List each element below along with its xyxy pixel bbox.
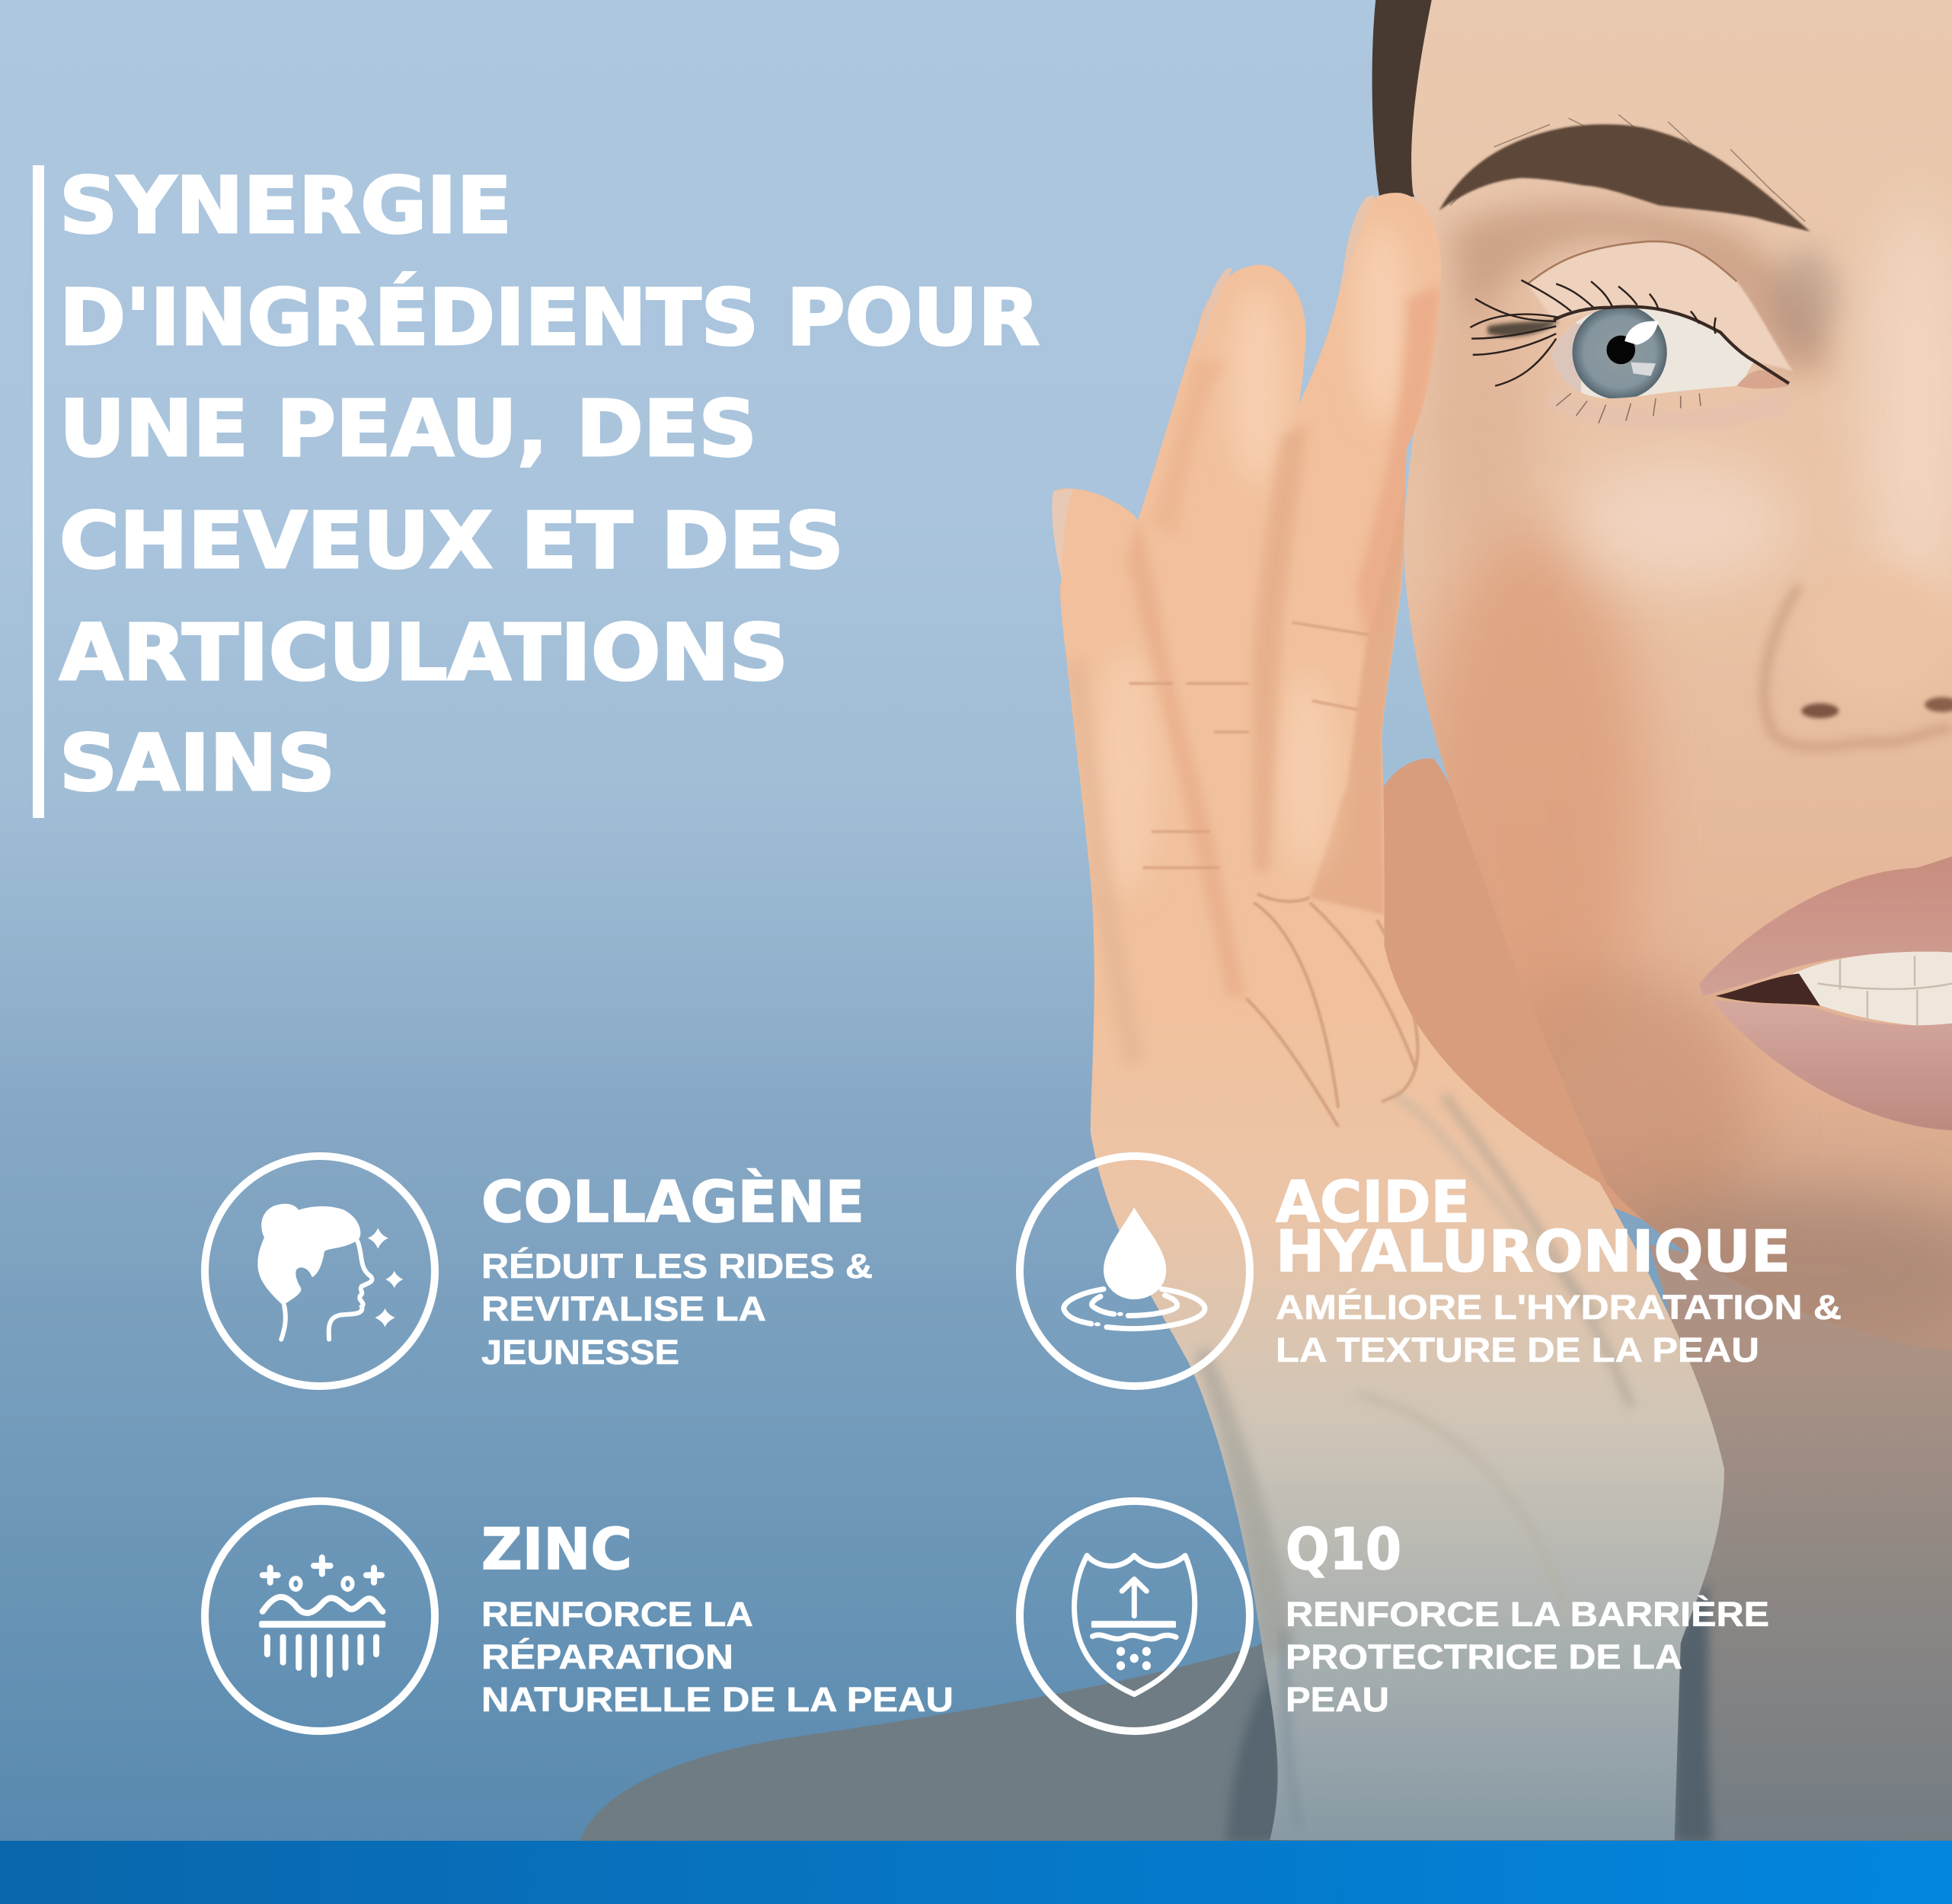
title: D'INGRÉDIENTS POUR [59, 272, 1040, 363]
title: ARTICULATIONS [59, 608, 788, 698]
title: SYNERGIE [59, 161, 512, 251]
item: acide hyaluronique: AMÉLIORE L'HYDRATATION & [1276, 1288, 1842, 1327]
item: collagène: JEUNESSE [481, 1333, 679, 1372]
eye [1470, 241, 1793, 431]
item: collagène: RÉDUIT LES RIDES & [481, 1247, 873, 1286]
item: q10: RENFORCE LA BARRIÈRE [1286, 1595, 1769, 1634]
icon: face with sparkles [205, 1156, 435, 1386]
item: collagène: REVITALISE LA [481, 1289, 766, 1328]
item: zinc: RÉPARATION [481, 1637, 733, 1676]
bottom colour band [0, 1841, 1952, 1904]
item: q10: PEAU [1286, 1680, 1389, 1719]
title: CHEVEUX ET DES [59, 496, 844, 586]
lips [1699, 857, 1952, 1130]
thumb behind the fingers [1379, 759, 1644, 1220]
nostrils [1801, 704, 1839, 718]
finger joint creases [1129, 622, 1369, 867]
fourth finger behind [1310, 491, 1405, 915]
eyebrow [1439, 114, 1810, 232]
shoulder and neck [579, 1245, 1952, 1842]
title: UNE PEAU, DES [59, 384, 757, 474]
nose side shadow [1764, 585, 1952, 747]
item: q10: PROTECTRICE DE LA [1286, 1637, 1682, 1676]
item: acide hyaluronique: LA TEXTURE DE LA PEAU [1276, 1331, 1759, 1369]
title [59, 161, 1040, 809]
item: q10 [1020, 1501, 1769, 1731]
item: acide hyaluronique: ACIDE [1276, 1168, 1470, 1235]
face [1404, 0, 1952, 1351]
item: collagène [205, 1156, 873, 1386]
icon: shield [1020, 1501, 1250, 1731]
hand [1052, 193, 1724, 1840]
fingernails [1052, 489, 1073, 579]
icon: water drop [1020, 1156, 1250, 1386]
palm folds [1246, 894, 1417, 1126]
eye socket shading [1450, 203, 1830, 373]
item: zinc: RENFORCE LA [481, 1595, 753, 1634]
hair [1372, 0, 1434, 196]
icon: skin repair layers [205, 1501, 435, 1731]
photo: woman touching her face [579, 0, 1952, 1842]
title: SAINS [59, 718, 335, 809]
item: q10: Q10 [1286, 1516, 1401, 1583]
finger shading [1126, 520, 1246, 998]
item: acide hyaluronique [1020, 1156, 1842, 1386]
title accent bar [33, 165, 44, 818]
item: acide hyaluronique: HYALURONIQUE [1276, 1218, 1791, 1285]
item: zinc: ZINC [481, 1516, 632, 1583]
item: zinc: NATURELLE DE LA PEAU [481, 1680, 954, 1719]
item: zinc [205, 1501, 954, 1731]
finger highlights [1354, 224, 1409, 423]
item: collagène: COLLAGÈNE [481, 1168, 864, 1235]
